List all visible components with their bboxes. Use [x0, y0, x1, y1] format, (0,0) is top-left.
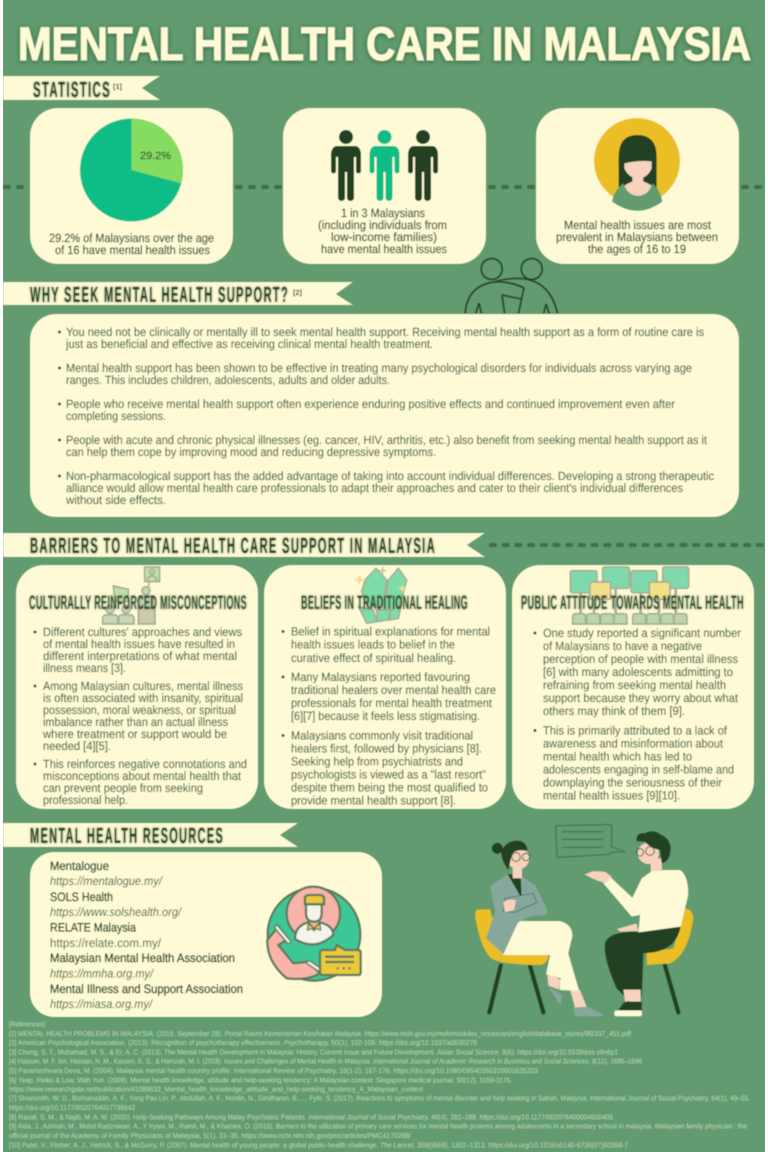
- heading: why seek support banner: [3, 282, 353, 307]
- icon: three people: [331, 130, 438, 201]
- panel: beliefs in traditional healing: BELIEFS IN TRADITIONAL HEALING: [301, 592, 468, 614]
- references: [3] Chong, S. T., Mohamad, M. S., & Er, A. C. (2013). The Mental Health Development in Malaysia: History, Current Issue and Future Development. Asian Social Science, 9(6). https://doi.org/10.5539/ass.v9n6p1: [9, 1048, 618, 1056]
- bullet list: People who receive mental health support often experience enduring positive effects and continued improvement even after: [66, 397, 675, 411]
- heading: resources banner: MENTAL HEALTH RESOURCES: [30, 823, 224, 848]
- bullet list: despite them being the most qualified to: [291, 780, 488, 794]
- resource list: https://www.solshealth.org/: [50, 905, 183, 919]
- heading: resources banner: [3, 823, 298, 848]
- bullet list: illness means [3].: [43, 661, 126, 675]
- bullet list: Mental health support has been shown to be effective in treating many psychological disorders for individuals across varying age: [66, 361, 692, 375]
- resource list: RELATE Malaysia: [50, 920, 136, 934]
- bullet list: just as beneficial and effective as receiving clinical mental health treatment.: [65, 337, 433, 351]
- bullet list: is often associated with insanity, spiritual: [43, 691, 243, 705]
- bullet list: professionals for mental health treatment: [291, 696, 493, 710]
- woman on chair: [475, 841, 603, 1016]
- bullet list: of mental health issues have resulted in: [43, 637, 235, 651]
- bullet list: can help them cope by improving mood and reducing depressive symptoms.: [66, 445, 436, 459]
- man on chair: [584, 831, 693, 1016]
- bullet list: professional help.: [43, 793, 128, 807]
- bullet list: mental health which has led to: [543, 750, 692, 764]
- bullet list: misconceptions about mental health that: [43, 769, 242, 783]
- bullet list: provide mental health support [8].: [291, 794, 456, 808]
- caption: of 16 have mental health issues: [55, 243, 210, 257]
- bullet list: curative effect of spiritual healing.: [291, 651, 456, 665]
- heading: statistics banner: STATISTICS: [33, 77, 111, 102]
- icon: young woman portrait: [594, 118, 680, 211]
- bullet list: You need not be clinically or mentally ill to seek mental health support. Receiving mental health support as a form of routine care is: [66, 325, 704, 339]
- bullet list: [34, 625, 247, 807]
- references: [10] Patel, V., Flisher, A. J., Hetrick, S., & McGorry, P. (2007). Mental health of young people: a global public-health challenge. The Lancet, 369(9569), 1302–1313. https://doi.org/10.1016/s0140-6736(07)60368-7: [9, 1140, 628, 1150]
- bullet list: [534, 626, 741, 802]
- caption: [49, 231, 214, 257]
- bullet list: where treatment or support would be: [42, 727, 227, 741]
- bullet list: mental health issues [9][10].: [543, 788, 680, 802]
- resource list: https://relate.com.my/: [50, 936, 162, 950]
- heading: statistics banner: [3, 76, 160, 102]
- heading: why seek support banner: WHY SEEK MENTAL HEALTH SUPPORT?: [30, 282, 289, 307]
- bullet list: This reinforces negative connotations and: [43, 757, 247, 771]
- panel: age statistic: [536, 108, 739, 264]
- bullet list: psychologists is viewed as a "last resort": [291, 768, 486, 782]
- bullet list: possession, moral weakness, or spiritual: [43, 703, 236, 717]
- bullet list: Many Malaysians reported favouring: [291, 670, 470, 684]
- references: [9, 1020, 750, 1150]
- panel: beliefs in traditional healing: [264, 565, 506, 809]
- caption: [318, 206, 447, 256]
- pie chart: [80, 118, 183, 222]
- bullet list: Different cultures' approaches and views: [43, 625, 242, 639]
- bullet list: support because they worry about what: [543, 691, 739, 705]
- resource list: https://miasa.org.my/: [50, 997, 154, 1011]
- references: [References]: [9, 1020, 45, 1028]
- caption: [556, 218, 718, 256]
- bullet list: [58, 325, 714, 507]
- icon: healing crystals: [354, 567, 407, 623]
- resource list: https://mmha.org.my/: [50, 966, 155, 980]
- bullet list: Non-pharmacological support has the added advantage of taking into account individual differences. Developing a strong therapeutic: [66, 469, 714, 483]
- references: https://www.researchgate.net/publication/41089633_Mental_health_knowledge_attitude_and_help-seeking_tendency_A_Malaysian_context: [9, 1084, 423, 1094]
- icon: crowd with speech bubbles: [570, 567, 689, 624]
- resource list: https://mentalogue.my/: [50, 874, 164, 888]
- bullet list: of Malaysians to have a negative: [543, 639, 702, 653]
- caption: (including individuals from: [318, 218, 447, 232]
- panel: why seek mental health support: [30, 314, 739, 517]
- panel: 1 in 3 statistic: [283, 108, 486, 264]
- caption: prevalent in Malaysians between: [556, 230, 718, 244]
- bullet list: imbalance rather than an actual illness: [43, 715, 228, 729]
- references: [5] Parameshvara Deva, M. (2004). Malaysia mental health country profile. International Review of Psychiatry, 16(1-2), 167-176. https://doi.org/10.1080/09540260310001635203: [9, 1066, 538, 1075]
- references: [6] Yeap, Reiko & Low, Wah Yun. (2009). Mental health knowledge, attitude and help-seeking tendency: A Malaysian context. Singapore medical journal. 50(12). 1169-1176.: [9, 1076, 512, 1084]
- heading: statistics banner: [1]: [113, 82, 122, 91]
- bullet list: refraining from seeking mental health: [543, 678, 726, 692]
- bullet list: perception of people with mental illness: [543, 652, 738, 666]
- references: official journal of the Academy of Family Physicians of Malaysia, 5(1), 31–35. https://www.ncbi.nlm.nih.gov/pmc/articles/PMC4170288/: [9, 1131, 412, 1140]
- bullet list: Among Malaysian cultures, mental illness: [43, 679, 243, 693]
- pie chart: 29.2%: [140, 150, 171, 162]
- bullet list: ranges. This includes children, adolescents, adults and older adults.: [66, 373, 390, 387]
- panel: public attitude towards mental health: [512, 565, 754, 809]
- icon: helpline counsellor: [267, 887, 361, 981]
- panel: mental health resources: [30, 852, 382, 1017]
- bullet list: downplaying the seriousness of their: [543, 776, 722, 790]
- panel: culturally reinforced misconceptions: [16, 565, 258, 809]
- bullet list: alliance would allow mental health care professionals to adapt their approaches and cater to their client's individual differences: [66, 481, 683, 495]
- bullet list: others may think of them [9].: [543, 704, 685, 718]
- panel: 29.2% statistic: [30, 108, 233, 264]
- bullet list: [6][7] because it feels less stigmatising.: [291, 709, 480, 723]
- bullet list: [6] with many adolescents admitting to: [543, 665, 733, 679]
- caption: Mental health issues are most: [564, 218, 712, 232]
- illustration: counselling conversation: [475, 825, 693, 1016]
- resource list: Mental Illness and Support Association: [50, 982, 243, 996]
- text: CULTURALLY REINFORCED MISCONCEPTIONS: [29, 592, 247, 614]
- bullet list: Malaysians commonly visit traditional: [291, 728, 473, 742]
- heading: why seek support banner: [2]: [293, 288, 302, 297]
- bullet list: People with acute and chronic physical illnesses (eg. cancer, HIV, arthritis, etc.) also benefit from seeking mental health support as it: [66, 433, 708, 447]
- bullet list: [282, 624, 496, 808]
- icon: crowd with placards: [103, 567, 160, 624]
- bullet list: traditional healers over mental health care: [291, 683, 496, 697]
- caption: 1 in 3 Malaysians: [341, 206, 425, 220]
- references: [1] MENTAL HEALTH PROBLEMS IN MALAYSIA. (2016, September 28). Portal Rasmi Kementerian Kesihatan Malaysia. https://www.moh.gov.my/moh/modules_resources/english/database_stores/96/337_451.pdf: [9, 1029, 632, 1038]
- icon: two friends outline: [465, 258, 558, 316]
- bullet list: needed [4][5].: [43, 739, 111, 753]
- bullet list: different interpretations of what mental: [43, 649, 237, 663]
- heading: barriers banner: [3, 533, 485, 558]
- references: https://doi.org/10.1177/0020764017739643: [9, 1103, 135, 1112]
- bullet list: This is primarily attributed to a lack of: [543, 724, 728, 738]
- bullet list: without side effects.: [65, 493, 166, 507]
- resource list: Mentalogue: [50, 859, 109, 873]
- resource list: Malaysian Mental Health Association: [50, 951, 235, 965]
- speech bubble: [556, 825, 625, 857]
- resource list: SOLS Health: [50, 890, 113, 904]
- caption: have mental health issues: [321, 242, 447, 256]
- bullet list: Seeking help from psychiatrists and: [291, 754, 463, 768]
- bullet list: adolescents engaging in self-blame and: [543, 762, 734, 776]
- bullet list: health issues leads to belief in the: [291, 638, 455, 652]
- bullet list: healers first, followed by physicians [8].: [291, 742, 482, 756]
- bullet list: can prevent people from seeking: [43, 781, 203, 795]
- caption: the ages of 16 to 19: [588, 242, 686, 256]
- references: [2] American Psychological Association. (2013). Recognition of psychotherapy effectiveness. Psychotherapy, 50(1), 102-109. https://doi.org/10.1037/a0030276: [9, 1038, 477, 1047]
- bullet list: completing sessions.: [66, 409, 166, 423]
- bullet list: Belief in spiritual explanations for mental: [291, 624, 490, 638]
- caption: 29.2% of Malaysians over the age: [49, 231, 214, 245]
- references: [4] Hassan, M. F. bin, Hassan, N. M., Kassim, E. S., & Hamzah, M. I. (2018). Issues and Challenges of Mental Health in Malaysia. International Journal of Academic Research in Business and Social Sciences, 8(12), 1685–1696: [9, 1056, 642, 1066]
- caption: low-income families): [331, 230, 437, 244]
- bullet list: One study reported a significant number: [543, 626, 741, 640]
- references: [8] Razali, S. M., & Najib, M. A. M. (2000). Help-Seeking Pathways Among Malay Psychiatric Patients. International Journal of Social Psychiatry, 46(4), 281–289. https://doi.org/10.1177/002076400004600405: [9, 1112, 613, 1122]
- bullet list: awareness and misinformation about: [543, 736, 724, 750]
- resource list: [50, 859, 243, 1011]
